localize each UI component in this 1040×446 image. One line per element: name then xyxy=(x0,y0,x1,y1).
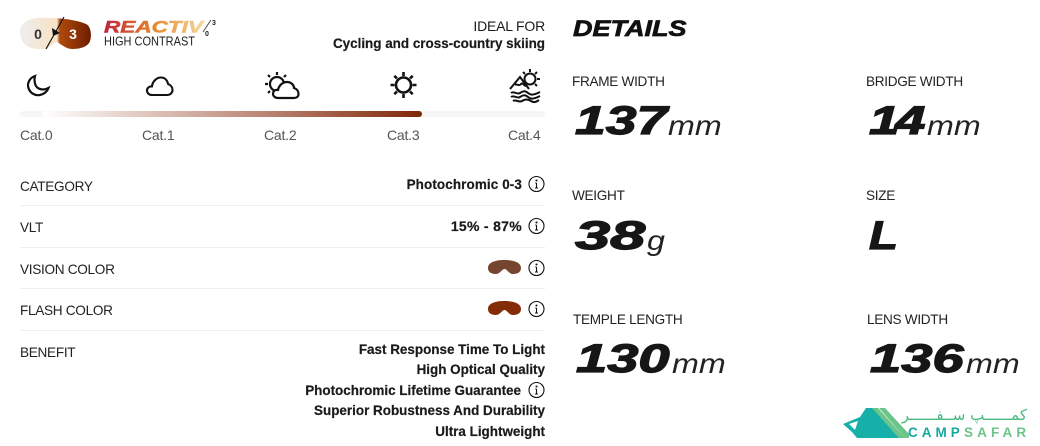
logo: camp safar: SAFAR xyxy=(964,425,1030,440)
heading: details: DETAILS xyxy=(573,16,687,41)
row: flash color: FLASH COLOR xyxy=(20,303,113,318)
brand: reactiv high contrast: 0 xyxy=(205,31,209,38)
spec: lens width: 136 xyxy=(870,337,964,381)
benefit list: Ultra Lightweight xyxy=(435,424,545,439)
category labels: Cat.4 xyxy=(508,127,540,143)
brand: reactiv high contrast: 3 xyxy=(212,20,216,27)
brand: reactiv high contrast xyxy=(104,18,216,48)
ideal for: IDEAL FOR xyxy=(473,18,545,34)
row: category: CATEGORY xyxy=(20,179,93,194)
icon: cloud xyxy=(146,76,174,96)
spec: weight xyxy=(572,188,665,258)
spec: frame width: 137 xyxy=(575,99,667,143)
spec: frame width: FRAME WIDTH xyxy=(572,74,665,89)
row: benefit: BENEFIT xyxy=(20,345,75,360)
lens: vision colour xyxy=(488,260,521,274)
row: vision color: VISION COLOR xyxy=(20,262,115,277)
icon: moon xyxy=(26,74,50,96)
row: vlt: VLT xyxy=(20,220,43,235)
value: photochromic: Photochromic 0-3 xyxy=(407,177,522,192)
logo: camp safar: کمــــــپ ســفــــــر xyxy=(901,406,1028,425)
spec: lens width: LENS WIDTH xyxy=(867,312,948,327)
benefit list: High Optical Quality xyxy=(417,362,545,377)
benefit list xyxy=(305,342,545,440)
category labels: Cat.3 xyxy=(387,127,419,143)
benefit list: Superior Robustness And Durability xyxy=(314,403,545,418)
spec: bridge width xyxy=(866,74,981,143)
lens badge: 0 to 3: 0 xyxy=(34,26,42,42)
ideal for: Cycling and cross-country skiing xyxy=(333,36,545,51)
icon: sun and cloud xyxy=(265,72,300,100)
brand: reactiv high contrast: HIGH CONTRAST xyxy=(104,34,195,48)
category labels: Cat.1 xyxy=(142,127,174,143)
icon: sun over mountain and water xyxy=(509,69,540,104)
icon: sun xyxy=(390,72,416,98)
lens: flash colour xyxy=(488,301,521,315)
spec: temple length: mm xyxy=(672,348,726,379)
logo: camp safar: CAMP xyxy=(908,425,964,440)
spec: temple length: TEMPLE LENGTH xyxy=(573,312,682,327)
ideal for xyxy=(333,18,545,52)
spec: size xyxy=(866,188,898,258)
spec: bridge width: mm xyxy=(927,110,981,141)
spec: size: SIZE xyxy=(866,188,895,203)
logo: camp safar xyxy=(843,406,1030,440)
spec: frame width xyxy=(572,74,722,143)
spec: temple length xyxy=(573,312,726,381)
lens badge: 0 to 3: 3 xyxy=(69,26,77,42)
spec: weight: g xyxy=(647,225,665,256)
spec: temple length: 130 xyxy=(576,337,670,381)
lens badge: 0 to 3 xyxy=(20,16,91,50)
category bar xyxy=(20,111,545,117)
value: vlt: 15% - 87% xyxy=(451,218,522,234)
category labels: Cat.2 xyxy=(264,127,296,143)
spec: size: L xyxy=(869,214,898,258)
brand: reactiv high contrast: REACTIV xyxy=(104,18,205,36)
category labels: Cat.0 xyxy=(20,127,52,143)
benefit list: Fast Response Time To Light xyxy=(359,342,545,357)
spec: bridge width: BRIDGE WIDTH xyxy=(866,74,963,89)
spec: weight: WEIGHT xyxy=(572,188,625,203)
spec: frame width: mm xyxy=(668,110,722,141)
info icons xyxy=(528,176,545,398)
spec: bridge width: 14 xyxy=(869,99,921,143)
spec: lens width xyxy=(867,312,1020,381)
spec: weight: 38 xyxy=(575,214,645,258)
spec: lens width: mm xyxy=(966,348,1020,379)
category labels xyxy=(20,127,540,143)
benefit list: Photochromic Lifetime Guarantee xyxy=(305,383,521,398)
